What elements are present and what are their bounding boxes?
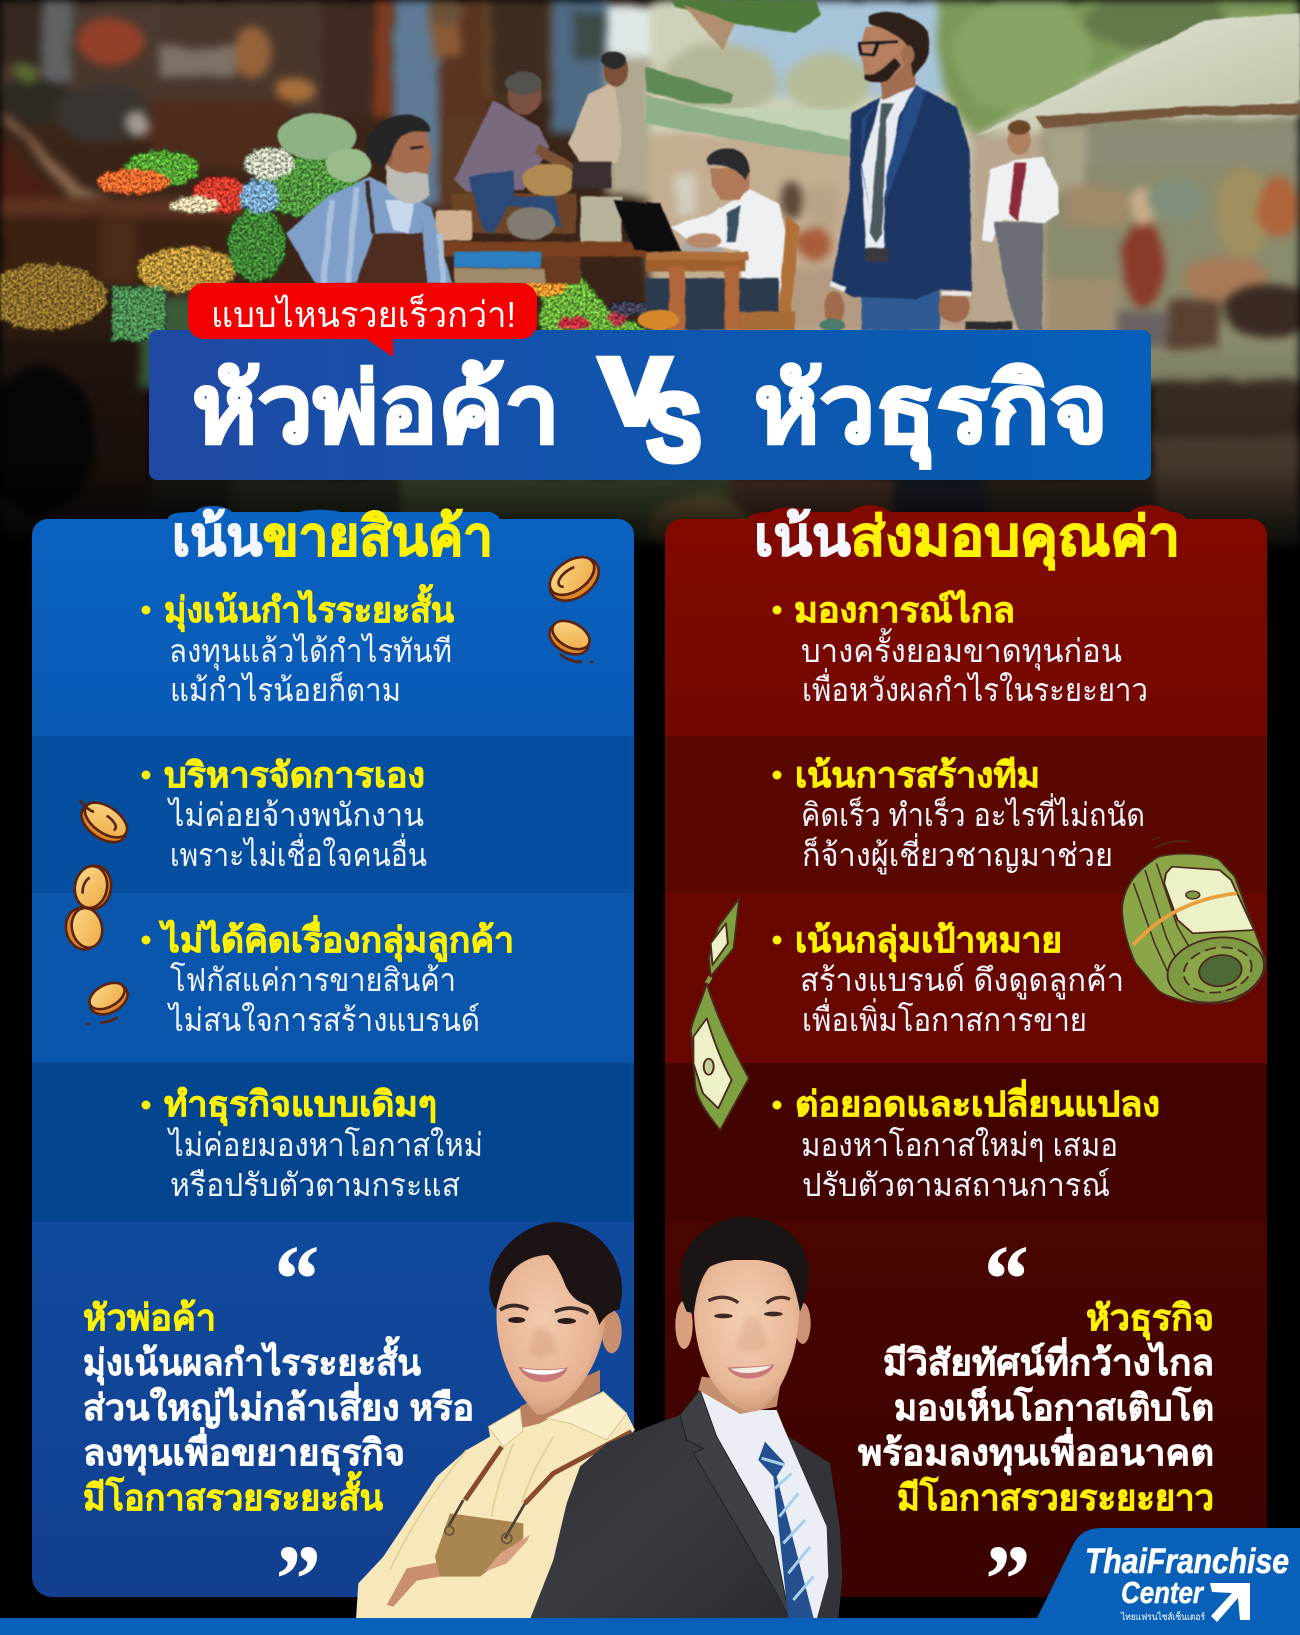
list: left column points: แม้กำไรน้อยก็ตาม (170, 671, 401, 708)
list: right column points (772, 589, 1160, 1203)
title right: หัวธุรกิจ (754, 356, 1108, 469)
logo: ThaiFranchise Center: Center (1121, 1575, 1205, 1610)
quote left: หัวพ่อค้า (83, 1297, 216, 1338)
tent (973, 13, 1300, 137)
quote left: มีโอกาสรวยระยะสั้น (83, 1471, 383, 1518)
list: right column points: สร้างแบรนด์ ดึงดูดลูกค้า (800, 962, 1124, 1000)
list: right column points: มองการณ์ไกล (794, 589, 1015, 630)
heading left: เน้นขายสินค้า (172, 507, 493, 567)
VS mark: S (647, 375, 701, 481)
VS mark: V (601, 341, 669, 443)
list: right column points: บางครั้งยอมขาดทุนก่อน (801, 628, 1122, 671)
logo: ThaiFranchise Center: ไทยแฟรนไชส์เซ็นเตอร์ (1120, 1610, 1205, 1623)
quote left (83, 1225, 474, 1633)
falling bill (691, 898, 749, 1130)
list: right column points: ต่อยอดและเปลี่ยนแปลง (795, 1079, 1160, 1124)
logo arrow (1210, 1583, 1250, 1622)
portrait: merchant man (356, 1222, 635, 1619)
ground and lower market (0, 340, 150, 540)
icon: money roll and falling bill (691, 837, 1273, 1130)
list: left column points: ไม่สนใจการสร้างแบรนด์ (166, 1002, 480, 1038)
panel: left (หัวพ่อค้า) (32, 506, 634, 1597)
list: left column points: ทำธุรกิจแบบเดิมๆ (164, 1085, 437, 1126)
quote right: “ (979, 1225, 1027, 1333)
quote left: ลงทุนเพื่อขยายธุรกิจ (83, 1427, 405, 1476)
money roll (1122, 837, 1273, 1012)
distant man (982, 157, 1058, 242)
produce (0, 147, 651, 340)
panel: right (หัวธุรกิจ) (665, 505, 1267, 1597)
bottom bar (0, 1618, 1300, 1635)
quote right: มีโอกาสรวยระยะยาว (897, 1476, 1214, 1518)
list: left column points: เพราะไม่เชื่อใจคนอื่น (170, 833, 427, 873)
list: left column points: ลงทุนแล้วได้กำไรทันที (169, 633, 452, 671)
list: right column points: ปรับตัวตามสถานการณ์ (802, 1167, 1110, 1203)
quote left: มุ่งเน้นผลกำไรระยะสั้น (83, 1336, 421, 1386)
list: right column points: เพื่อเพิ่มโอกาสการขาย (802, 998, 1087, 1038)
list: left column points: บริหารจัดการเอง (164, 756, 425, 795)
portrait: business man (530, 1217, 842, 1619)
bearded man (286, 177, 452, 283)
quote right: ” (980, 1525, 1028, 1633)
list: left column points: ไม่ค่อยจ้างพนักงาน (166, 797, 424, 833)
list: right column points: คิดเร็ว ทำเร็ว อะไรที่ไม่ถนัด (801, 793, 1145, 833)
list: left column points: หรือปรับตัวตามกระแส (170, 1167, 460, 1203)
quote right: หัวธุรกิจ (1086, 1297, 1214, 1341)
list: right column points: มองหาโอกาสใหม่ๆ เสมอ (801, 1127, 1118, 1163)
list: left column points: ไม่ค่อยมองหาโอกาสใหม่ (166, 1127, 483, 1163)
background photo: market scene (0, 0, 1300, 600)
list: left column points: มุ่งเน้นกำไรระยะสั้น (164, 584, 454, 632)
quote left: ” (270, 1525, 319, 1633)
heading right: เน้นส่งมอบคุณค่า (754, 507, 1180, 571)
callout bubble: แบบไหนรวยเร็วกว่า! (211, 292, 516, 335)
callout bubble (188, 283, 537, 357)
quote left: ส่วนใหญ่ไม่กล้าเสี่ยง หรือ (83, 1382, 474, 1429)
list: right column points: เน้นการสร้างทีม (795, 756, 1040, 795)
icon: gold coins (62, 548, 607, 1024)
laptop man (671, 190, 788, 293)
VS mark (601, 341, 701, 481)
list: right column points: เพื่อหวังผลกำไรในระยะยาว (802, 668, 1148, 708)
title banner (149, 330, 1151, 481)
quote right (858, 1225, 1214, 1633)
quote right: มีวิสัยทัศน์ที่กว้างไกล (883, 1337, 1214, 1383)
title left: หัวพ่อค้า (192, 356, 560, 463)
list: right column points: เน้นกลุ่มเป้าหมาย (795, 921, 1062, 962)
list: left column points: โฟกัสแค่การขายสินค้า (170, 962, 456, 998)
quote right: มองเห็นโอกาสเติบโต (894, 1385, 1214, 1428)
quote right: พร้อมลงทุนเพื่ออนาคต (858, 1427, 1214, 1476)
logo: ThaiFranchise Center (0, 1528, 1300, 1635)
quote left: “ (270, 1225, 318, 1333)
list: right column points: ก็จ้างผู้เชี่ยวชาญมาช่วย (802, 833, 1113, 875)
businessman (861, 260, 940, 330)
list: left column points (142, 584, 514, 1203)
list: left column points: ไม่ได้คิดเรื่องกลุ่มลูกค้า (158, 915, 514, 962)
